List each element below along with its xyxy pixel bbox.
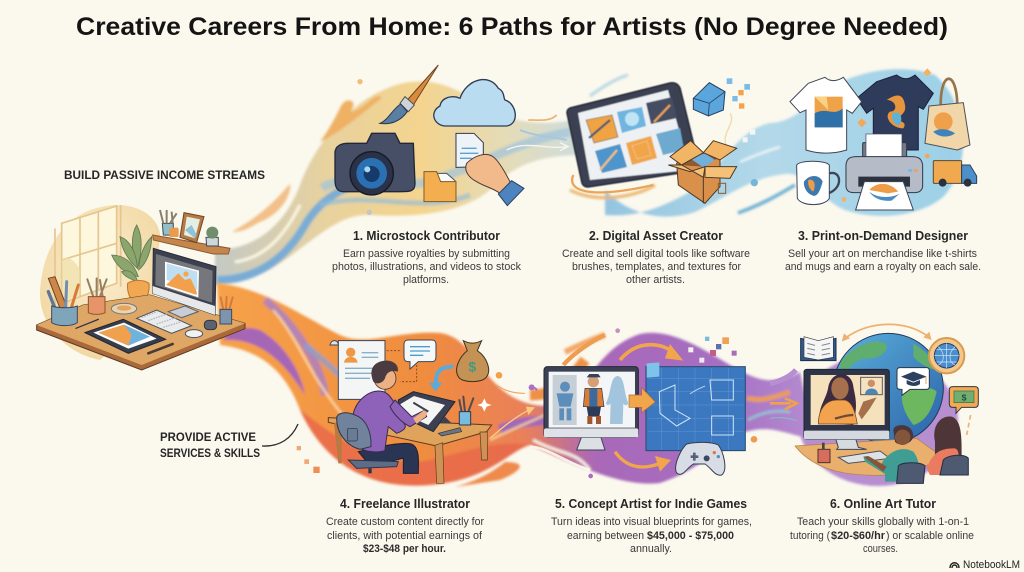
dark t-shirt (857, 75, 933, 150)
delivery truck (933, 161, 977, 187)
card text: 2. Digital Asset Creator: brushes, templates, and textures for (572, 261, 741, 273)
globe icon (929, 338, 964, 373)
drawing tablet (398, 392, 462, 436)
speech bubble (404, 340, 436, 369)
printer (846, 134, 923, 210)
camera (335, 133, 415, 195)
card text: 1. Microstock Contributor: photos, illustrations, and videos to stock (332, 261, 521, 273)
card text: 4. Freelance Illustrator: Create custom content directly for (326, 516, 484, 528)
card text: 2. Digital Asset Creator: other artists. (626, 274, 685, 286)
globe (833, 333, 943, 443)
watermark: NotebookLM: NotebookLM (963, 559, 1020, 571)
orange arrows (615, 344, 683, 472)
card text: 6. Online Art Tutor: courses. (863, 543, 898, 555)
desk (795, 438, 947, 475)
card text: 3. Print-on-Demand Designer: and mugs and earn a royalty on each sale. (785, 261, 981, 273)
card text: 1. Microstock Contributor: 1. Microstock Contributor (353, 228, 500, 243)
illustrator figure (353, 361, 428, 473)
game controller (676, 442, 725, 475)
card text: 1. Microstock Contributor: Earn passive royalties by submitting (343, 248, 510, 260)
document (456, 133, 483, 167)
illustration: freelance illustrator (297, 340, 535, 483)
card text: 2. Digital Asset Creator (562, 228, 750, 286)
card text: 3. Print-on-Demand Designer: Sell your art on merchandise like t-shirts (788, 248, 977, 260)
monitor (153, 248, 216, 318)
paint brush (380, 65, 438, 124)
card text: 6. Online Art Tutor: 6. Online Art Tutor (830, 496, 936, 511)
folder (424, 172, 456, 202)
dollar bubble (949, 387, 978, 413)
monitor with tutor (804, 369, 889, 449)
window (55, 205, 121, 310)
card text: 5. Concept Artist for Indie Games: $45,000 - $75,000 (647, 530, 734, 542)
mug (797, 161, 839, 205)
card text: 5. Concept Artist for Indie Games (551, 496, 752, 555)
white t-shirt (790, 77, 862, 153)
book (801, 337, 836, 361)
section label: passive: BUILD PASSIVE INCOME STREAMS (64, 168, 265, 182)
tote bag (925, 79, 970, 150)
pen cup (818, 443, 830, 463)
shelf with frame and plants (153, 210, 230, 254)
blueprint panel (646, 362, 745, 451)
flowing ribbon: passive income (top) (215, 69, 963, 285)
chair (337, 413, 398, 473)
section label: active: PROVIDE ACTIVE (160, 430, 256, 444)
drawing tablet (85, 319, 166, 353)
hand (466, 154, 524, 206)
brush tiles (586, 97, 684, 173)
illustration: open box and digital cube (668, 78, 758, 203)
illustration: microstock (335, 65, 653, 215)
card text: 3. Print-on-Demand Designer: 3. Print-on-Demand Designer (798, 228, 968, 243)
pencil cups (48, 277, 233, 326)
card text: 6. Online Art Tutor (790, 496, 974, 555)
curved arrow (845, 324, 928, 338)
illustration: print on demand (790, 68, 977, 210)
card text: 6. Online Art Tutor: tutoring ( (790, 530, 830, 542)
illustration: home art studio desk (37, 205, 245, 370)
card text: 2. Digital Asset Creator: 2. Digital Asset Creator (589, 228, 723, 243)
card text: 5. Concept Artist for Indie Games: 5. Concept Artist for Indie Games (555, 496, 747, 511)
blue arrow (436, 367, 453, 384)
card text: 1. Microstock Contributor: platforms. (403, 274, 449, 286)
card text: 1. Microstock Contributor (332, 228, 521, 286)
title: Creative Careers From Home: 6 Paths for Artists (No Degree Needed) (76, 13, 948, 41)
keyboard (838, 451, 890, 463)
card text: 2. Digital Asset Creator: Create and sell digital tools like software (562, 248, 750, 260)
card text: 6. Online Art Tutor: ) or scalable online (886, 530, 974, 542)
desk top (37, 295, 245, 370)
card text: 5. Concept Artist for Indie Games: earning between (567, 530, 644, 542)
card text: 5. Concept Artist for Indie Games: annually. (630, 543, 672, 555)
illustration: digital tablet (567, 83, 700, 187)
section label: active: SERVICES & SKILLS (160, 446, 260, 460)
card text: 4. Freelance Illustrator: clients, with potential earnings of (327, 530, 483, 542)
connector curve (262, 424, 298, 446)
card text: 4. Freelance Illustrator (326, 496, 484, 555)
pen cup (459, 397, 473, 425)
card text: 4. Freelance Illustrator: $23-$48 per hour. (363, 543, 446, 555)
money bag (457, 341, 489, 382)
flowing ribbon: active services (bottom) (217, 283, 958, 487)
desk (328, 418, 492, 483)
students (863, 416, 968, 483)
card text: 4. Freelance Illustrator: 4. Freelance Illustrator (340, 496, 470, 511)
illustration: concept artist (530, 328, 757, 478)
card text: 6. Online Art Tutor: $20-$60/hr (831, 530, 886, 542)
section label: active (160, 430, 260, 460)
card text: 3. Print-on-Demand Designer (785, 228, 981, 273)
card text: 5. Concept Artist for Indie Games: Turn ideas into visual blueprints for games, (551, 516, 752, 528)
card text: 6. Online Art Tutor: Teach your skills globally with 1-on-1 (797, 516, 969, 528)
potted plant (112, 225, 152, 302)
cloud (434, 80, 515, 126)
graduation cap bubble (897, 368, 929, 395)
window glow (40, 205, 160, 360)
dollar bubble: $ (962, 392, 967, 402)
money bag: $ (468, 359, 476, 375)
monitor with character sheet (544, 367, 638, 450)
illustration: online tutor (770, 324, 978, 483)
keyboard and mouse (137, 310, 203, 338)
resume (330, 341, 385, 399)
